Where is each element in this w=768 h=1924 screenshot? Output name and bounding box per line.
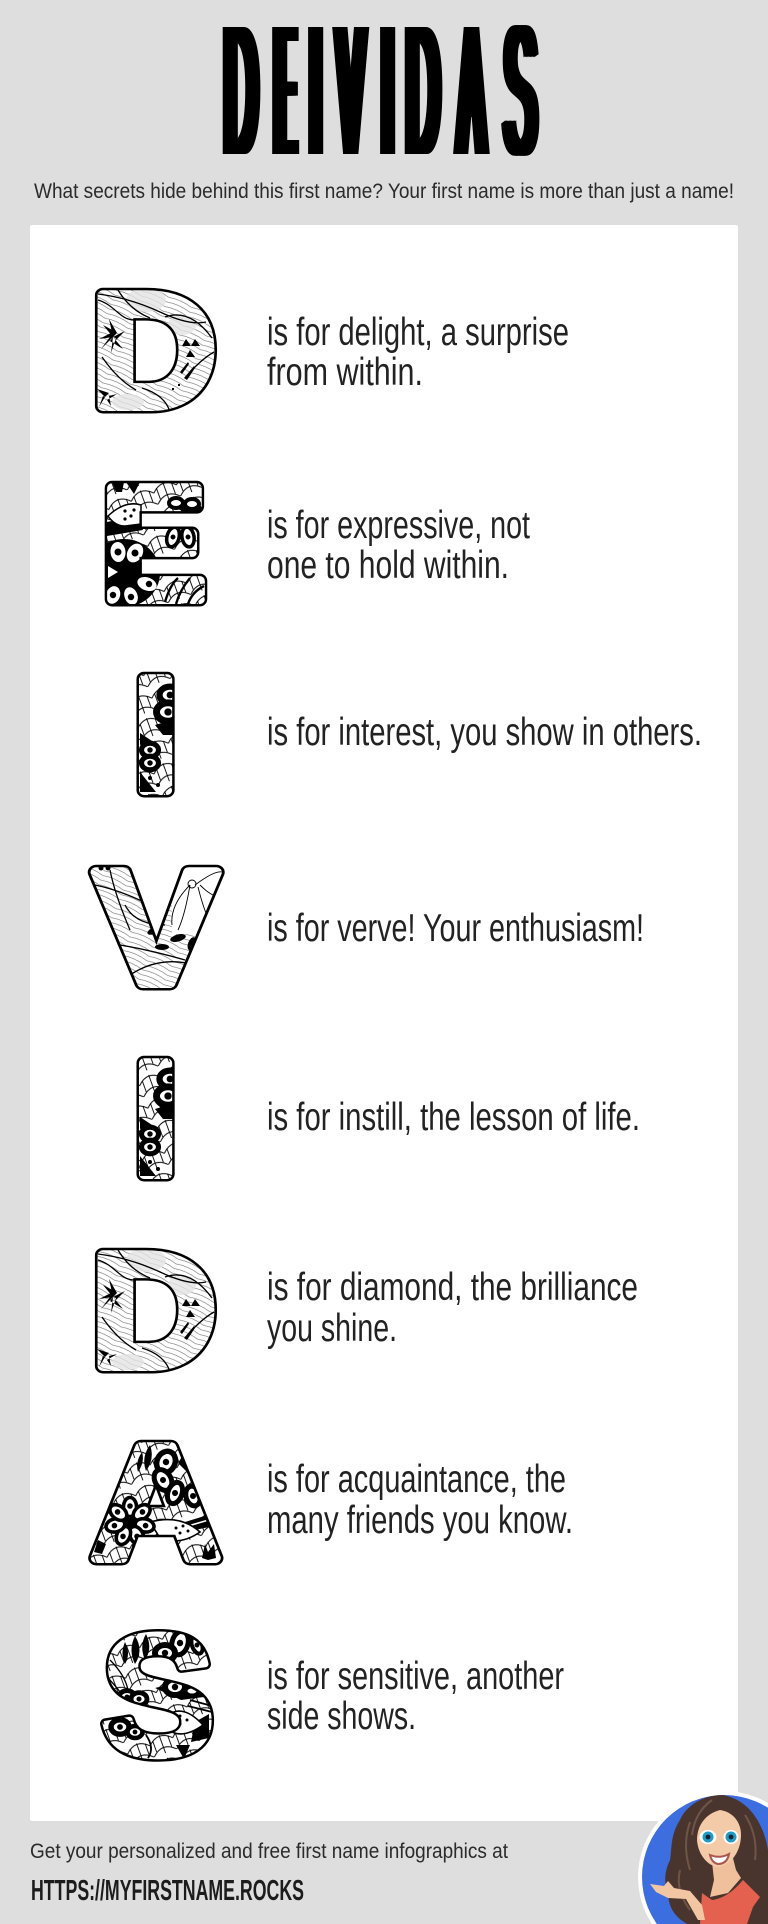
icon: mandala letter S (100, 1629, 214, 1762)
text line 1: is for acquaintance, the (267, 1458, 566, 1501)
icon: mandala letter I: I (133, 645, 178, 825)
hair highlights (679, 1800, 756, 1910)
neck and chest (710, 1858, 741, 1897)
row: letter V, verve (88, 864, 642, 990)
footer note: Get your personalized and free first name infographics at (30, 1840, 508, 1863)
icon: mandala letter A (88, 1440, 224, 1566)
icon: mandala letter I (136, 672, 175, 798)
face (697, 1810, 741, 1867)
row: letter I, interest (136, 672, 700, 798)
smile (710, 1854, 729, 1864)
avatar: cartoon woman in blue circle (638, 1791, 768, 1924)
icon: mandala letter V (88, 864, 225, 990)
icon: mandala letter V: V (95, 838, 217, 1018)
arm and hand (650, 1881, 705, 1920)
icon: mandala letter I (136, 1056, 175, 1182)
icon: mandala letter A: A (92, 1412, 220, 1592)
icon: mandala letter D: D (91, 261, 216, 441)
row: letter E, expressive (104, 480, 530, 606)
icon: mandala letter S: S (101, 1600, 215, 1792)
row: letter A, acquaintance (88, 1440, 570, 1566)
white content panel (30, 225, 738, 1821)
red shirt (700, 1880, 760, 1924)
hair (665, 1795, 768, 1924)
title (219, 0, 540, 194)
icon: mandala letter D (94, 1248, 218, 1374)
row: letter D, diamond (94, 1248, 637, 1374)
text line 2: from within. (267, 351, 423, 394)
large flower (107, 539, 160, 604)
icon: mandala letter D: D (91, 1221, 216, 1401)
text line 1: is for delight, a surprise (267, 311, 569, 354)
text line: is for instill, the lesson of life. (267, 1096, 640, 1139)
icon: mandala letter E (104, 480, 208, 606)
text line 2: many friends you know. (267, 1499, 573, 1542)
row: letter S, sensitive (100, 1629, 564, 1762)
eyes (700, 1830, 738, 1844)
row: letter I, instill (136, 1056, 638, 1182)
icon: mandala letter D (94, 288, 218, 414)
text line 2: you shine. (267, 1307, 397, 1350)
text line: is for verve! Your enthusiasm! (267, 907, 644, 950)
icon: mandala letter I: I (133, 1029, 178, 1209)
row: letter D, delight (94, 288, 568, 414)
text line 2: side shows. (267, 1695, 416, 1738)
icon: mandala letter E: E (102, 453, 206, 633)
text line 1: is for diamond, the brilliance (267, 1266, 638, 1309)
text line 1: is for sensitive, another (267, 1655, 564, 1698)
text line 2: one to hold within. (267, 544, 509, 587)
footer URL: HTTPS://MYFIRSTNAME.ROCKS (31, 1875, 304, 1907)
text line 1: is for expressive, not (267, 504, 530, 547)
